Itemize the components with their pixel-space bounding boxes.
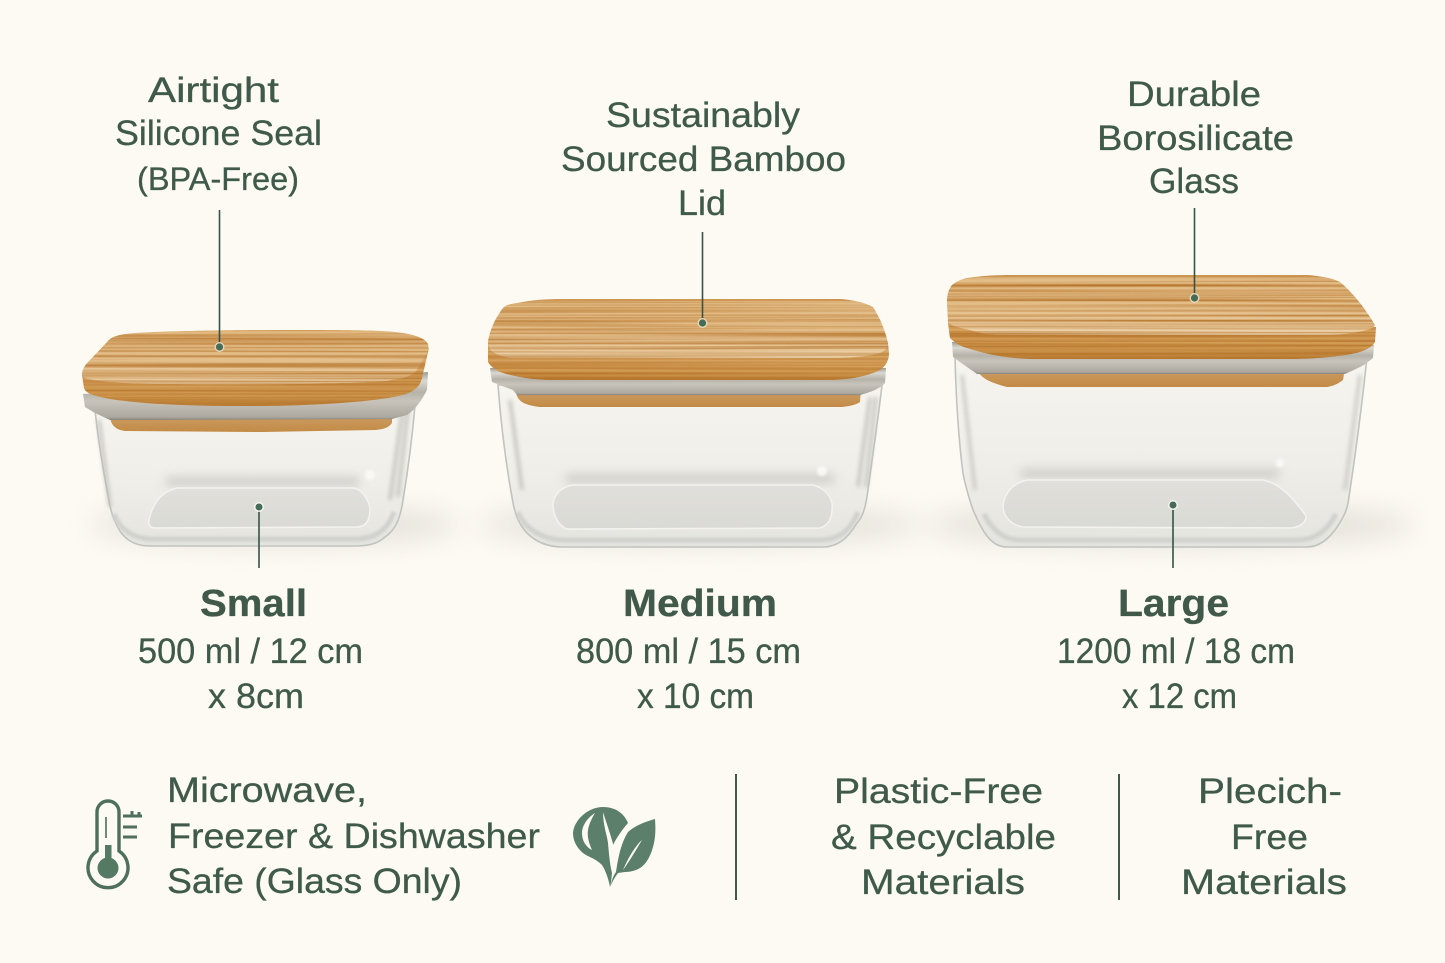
divider: [735, 774, 737, 900]
container: large: [925, 208, 1415, 568]
medium glass base: [553, 485, 832, 529]
small bottom leader: [254, 502, 264, 568]
text: microwave freezer dishwasher safe: [167, 771, 540, 901]
medium top leader: [698, 232, 708, 328]
large lid: [947, 275, 1376, 359]
text: plecich-free materials: Plecich-: [1198, 772, 1342, 811]
size: large: 1200 ml / 18 cm: [1057, 632, 1295, 671]
small inner seal: [110, 413, 392, 432]
text: plastic-free recyclable materials: & Recyclable: [831, 818, 1056, 857]
large glass body: [955, 357, 1367, 547]
large bottom leader: [1168, 500, 1178, 568]
size: large: [1057, 583, 1295, 716]
large inner seal: [977, 366, 1345, 387]
text: plastic-free recyclable materials: Materials: [861, 863, 1025, 902]
label: sustainably sourced bamboo lid: Sustainably: [606, 96, 801, 135]
label: airtight silicone seal: [115, 71, 322, 197]
label: airtight silicone seal: Silicone Seal: [115, 114, 322, 153]
divider: [1118, 774, 1120, 900]
label: durable borosilicate glass: Durable: [1127, 75, 1261, 114]
container: medium: [478, 232, 922, 547]
size: small: Small: [200, 583, 307, 625]
icon: thermometer: [88, 801, 142, 888]
small top leader: [214, 210, 224, 352]
text: microwave freezer dishwasher safe: Microwave,: [167, 771, 367, 810]
size: small: x 8cm: [208, 677, 304, 716]
medium inner seal: [516, 390, 861, 407]
small lid: [82, 330, 429, 406]
large top leader: [1190, 208, 1200, 303]
size: large: x 12 cm: [1122, 677, 1237, 716]
small glass body: [95, 405, 415, 546]
size: medium: [576, 583, 801, 716]
size: small: [138, 583, 363, 716]
label: durable borosilicate glass: Borosilicate: [1097, 119, 1294, 158]
label: airtight silicone seal: (BPA-Free): [137, 161, 299, 197]
large glass base: [1003, 480, 1306, 528]
label: durable borosilicate glass: [1097, 75, 1294, 201]
label: sustainably sourced bamboo lid: [561, 96, 846, 223]
container: small: [82, 210, 460, 568]
text: microwave freezer dishwasher safe: Safe (Glass Only): [167, 862, 462, 901]
size: medium: x 10 cm: [637, 677, 754, 716]
label: sustainably sourced bamboo lid: Sourced Bamboo: [561, 140, 846, 179]
small glass base: [149, 488, 370, 528]
size: large: Large: [1118, 583, 1229, 625]
medium glass body: [498, 385, 882, 547]
text: plecich-free materials: [1181, 772, 1347, 902]
large glass rim: [952, 342, 1374, 374]
size: small: 500 ml / 12 cm: [138, 632, 363, 671]
text: plecich-free materials: Free: [1231, 818, 1308, 857]
medium glass rim: [490, 368, 886, 395]
icon: leaves: [573, 807, 655, 887]
text: plastic-free recyclable materials: Plastic-Free: [834, 772, 1043, 811]
size: medium: Medium: [623, 583, 777, 625]
text: microwave freezer dishwasher safe: Freezer & Dishwasher: [168, 817, 540, 856]
label: airtight silicone seal: Airtight: [148, 71, 279, 110]
text: plecich-free materials: Materials: [1181, 863, 1347, 902]
size: medium: 800 ml / 15 cm: [576, 632, 801, 671]
medium lid: [488, 299, 889, 380]
label: sustainably sourced bamboo lid: Lid: [678, 184, 726, 223]
text: plastic-free recyclable materials: [831, 772, 1056, 902]
small glass rim: [83, 372, 428, 420]
label: durable borosilicate glass: Glass: [1149, 162, 1239, 201]
